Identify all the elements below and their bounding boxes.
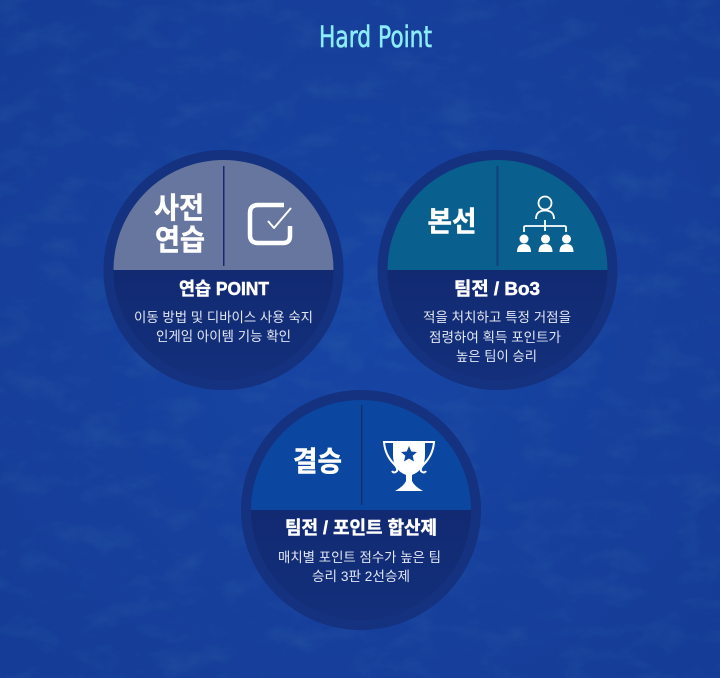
text: practice description: 이동 방법 및 디바이스 사용 숙지	[134, 310, 313, 325]
heading: 결승: 결승	[293, 446, 342, 477]
icon: trophy	[384, 441, 434, 491]
text: main round description: 적을 처치하고 특정 거점을	[423, 310, 571, 325]
text: final description	[278, 550, 441, 584]
text: main round description: 점령하여 획득 포인트가	[429, 330, 561, 345]
heading: 사전 연습: 연습	[155, 224, 205, 257]
heading: 팀전 / 포인트 합산제: 팀전 / 포인트 합산제	[285, 518, 437, 538]
heading: 팀전 / Bo3: 팀전 / Bo3	[454, 279, 540, 299]
text: final description: 매치별 포인트 점수가 높은 팀	[278, 550, 441, 565]
text: main round description: 높은 팀이 승리	[456, 349, 537, 364]
icon: checkbox	[250, 205, 291, 243]
text: final description: 승리 3판 2선승제	[312, 569, 410, 584]
text: main round description	[423, 310, 571, 364]
heading: 사전 연습: 사전	[154, 192, 204, 225]
heading: 연습 POINT: 연습 POINT	[179, 279, 269, 299]
panel: main round	[378, 150, 618, 390]
panel: final	[241, 390, 481, 630]
heading: 사전 연습	[154, 192, 205, 257]
heading: 본선: 본선	[428, 206, 476, 237]
text: practice description: 인게임 아이템 기능 확인	[156, 329, 291, 344]
title: Hard Point	[319, 20, 432, 54]
text: practice description	[134, 310, 313, 344]
panel: pre-practice	[104, 150, 344, 390]
icon: team hierarchy	[517, 196, 574, 252]
